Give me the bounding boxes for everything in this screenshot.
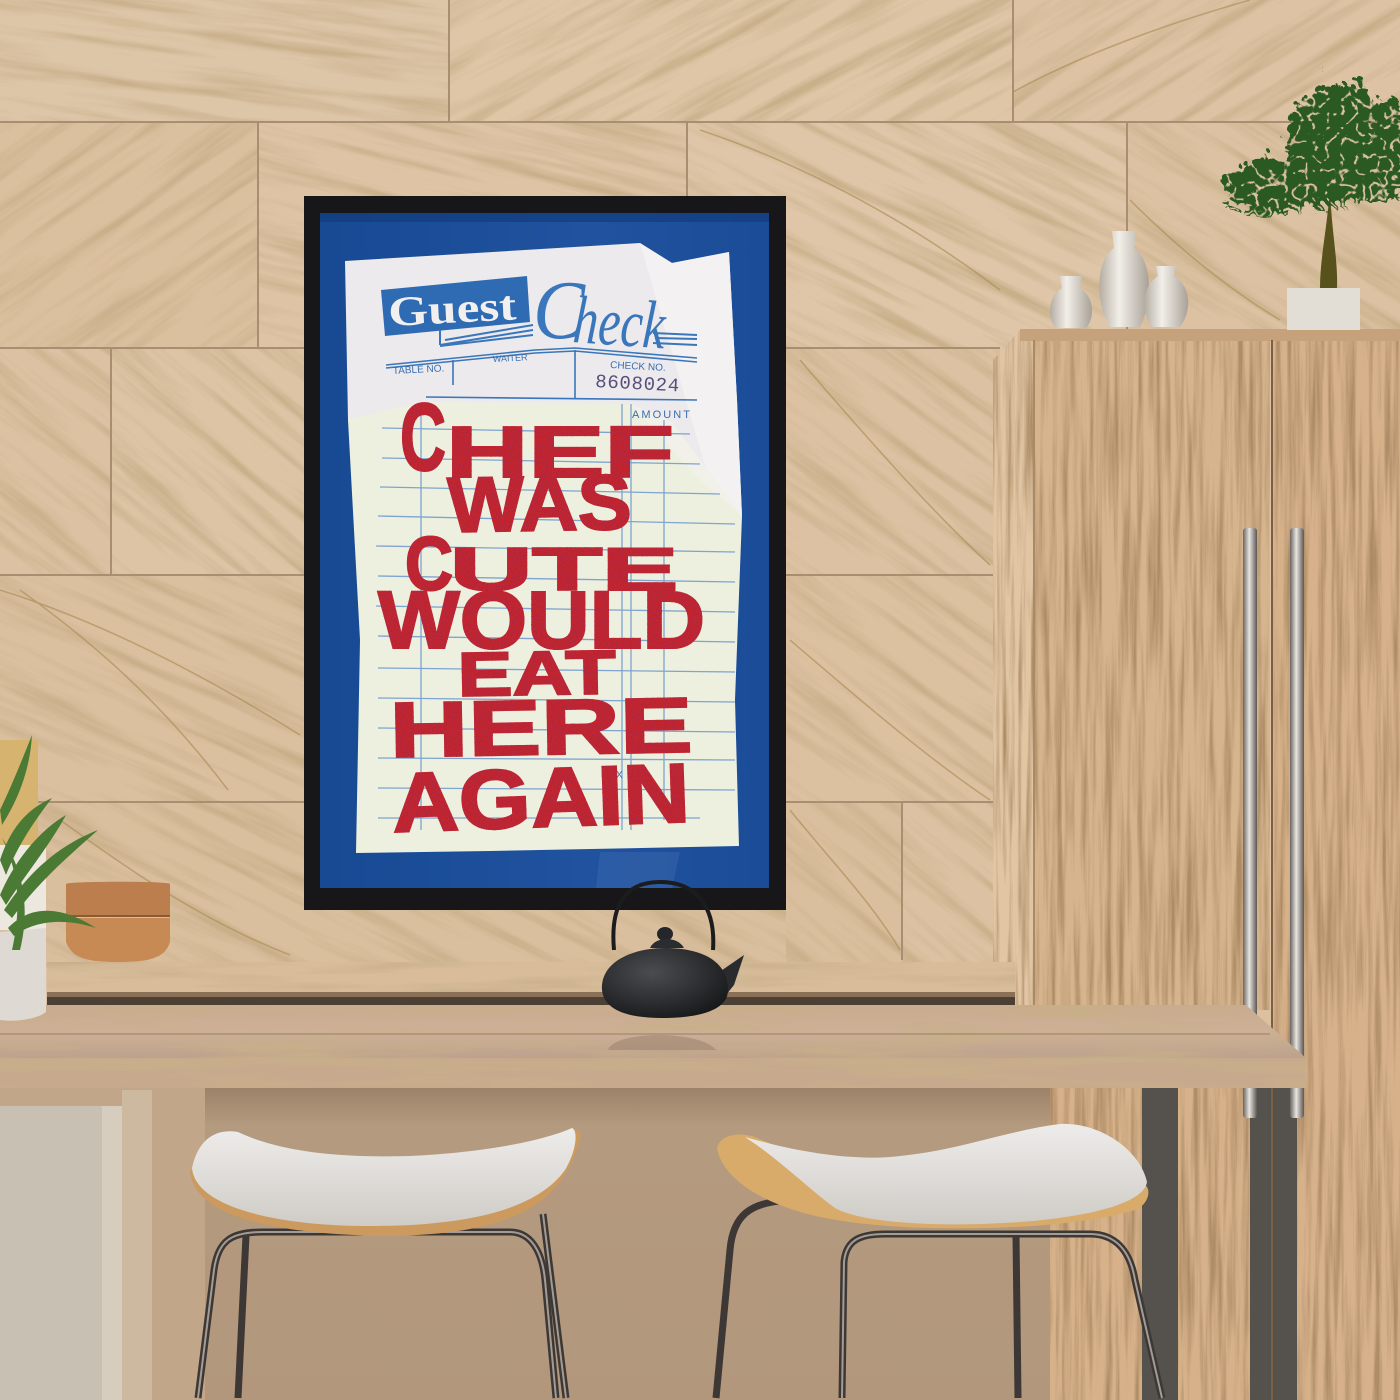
poster message in red glitter xyxy=(378,384,705,850)
guest check: lower cream paper with ruled lines xyxy=(348,402,742,853)
wooden bowls xyxy=(66,882,170,962)
under-island wall xyxy=(205,1088,1050,1400)
potted tree on cabinet xyxy=(1216,75,1400,330)
poster message in red glitter: WOULD xyxy=(378,575,705,666)
right door xyxy=(1273,340,1400,1400)
guest check logo: Guest xyxy=(387,283,517,336)
left cutting board, bowls and plant xyxy=(0,735,170,1021)
left bar stool xyxy=(190,1128,581,1398)
poster message in red glitter: WAS xyxy=(447,458,632,549)
white cushion xyxy=(192,1128,576,1226)
poster message in red glitter: AGAIN xyxy=(390,746,691,850)
wood shell xyxy=(190,1128,581,1236)
island surface xyxy=(0,1005,1306,1058)
poster: blue background xyxy=(320,213,769,888)
check form labels and rules: CHECK NO. xyxy=(610,360,666,374)
island front edge xyxy=(0,1058,1306,1088)
left door xyxy=(1034,340,1270,1010)
white plant pot xyxy=(0,928,46,1021)
plant leaves xyxy=(0,735,98,950)
guest check logo: C xyxy=(533,264,586,357)
poster message in red glitter: C xyxy=(400,384,446,491)
check form labels and rules: WAITER xyxy=(493,352,528,364)
poster message in red glitter: C xyxy=(405,522,453,607)
poster message in red glitter: UTE xyxy=(450,536,678,603)
left base cabinet xyxy=(0,1088,205,1400)
dark gaps under island xyxy=(1142,1085,1297,1400)
wood shell xyxy=(717,1134,1148,1228)
vases on cabinet xyxy=(1050,231,1188,328)
cutting board xyxy=(0,740,38,850)
poster message in red glitter: HERE xyxy=(389,681,693,774)
white cushion xyxy=(745,1124,1147,1224)
legs xyxy=(716,1200,1162,1398)
cabinet top edge xyxy=(1020,329,1400,341)
guest check: upper white paper xyxy=(345,243,742,516)
teapot xyxy=(602,882,744,1018)
poster message in red glitter: HEF xyxy=(446,413,674,493)
guest check logo: heck xyxy=(571,281,669,363)
lower wood panels xyxy=(1050,1085,1142,1400)
guest check: lower cream paper with ruled lines: TAX xyxy=(604,770,623,781)
frame: black border xyxy=(304,196,786,910)
check form labels and rules: 8608024 xyxy=(595,371,680,397)
tall wood cabinet xyxy=(993,329,1400,1400)
back counter shelf xyxy=(47,962,1015,1006)
framed poster xyxy=(304,196,786,910)
kitchen island xyxy=(0,1005,1306,1400)
door handles xyxy=(1243,528,1257,1118)
guest check logo xyxy=(381,264,697,363)
check form labels and rules xyxy=(386,348,697,400)
guest check: lower cream paper with ruled lines: AMOUNT xyxy=(632,409,690,421)
poster message in red glitter: EAT xyxy=(457,638,616,710)
legs xyxy=(198,1214,566,1398)
right bar stool xyxy=(716,1124,1162,1398)
check form labels and rules: TABLE NO. xyxy=(393,363,445,377)
reflection of shelf and teapot xyxy=(0,1033,1270,1050)
cabinet side panel xyxy=(993,330,1033,1010)
